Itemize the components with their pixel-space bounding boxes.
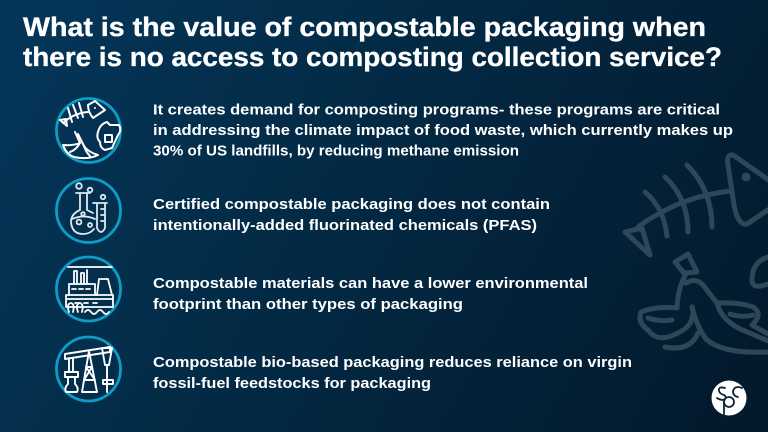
text block 2: intentionally-added fluorinated chemicals (PFAS) (153, 217, 537, 234)
text block 3: footprint than other types of packaging (153, 296, 463, 313)
icon: food waste (56, 98, 120, 162)
text block 1: 30% of US landfills, by reducing methane emission (153, 142, 519, 160)
text block 1: in addressing the climate impact of food waste, which currently makes up (153, 122, 733, 139)
icon: chemistry flask and test tube (56, 178, 120, 242)
title: What is the value of compostable packaging when (23, 12, 706, 42)
text block 4: fossil-fuel feedstocks for packaging (153, 375, 431, 392)
text block 3: Compostable materials can have a lower environmental (153, 275, 588, 292)
icon: oil pump jack (56, 337, 120, 401)
title (23, 12, 722, 72)
title: there is no access to composting collection service? (23, 42, 722, 72)
text block 1: It creates demand for composting programs- these programs are critical (153, 102, 720, 118)
text block 4: Compostable bio-based packaging reduces reliance on virgin (153, 354, 632, 371)
text block 2 (153, 196, 550, 234)
text block 2: Certified compostable packaging does not contain (153, 196, 550, 213)
logo (712, 380, 746, 416)
text block 3 (153, 275, 588, 313)
text block 4 (153, 354, 632, 392)
watermark: fish skeleton, banana peel and apple core (625, 155, 768, 352)
text block 1 (153, 102, 733, 160)
icon: factory ship (56, 257, 120, 321)
